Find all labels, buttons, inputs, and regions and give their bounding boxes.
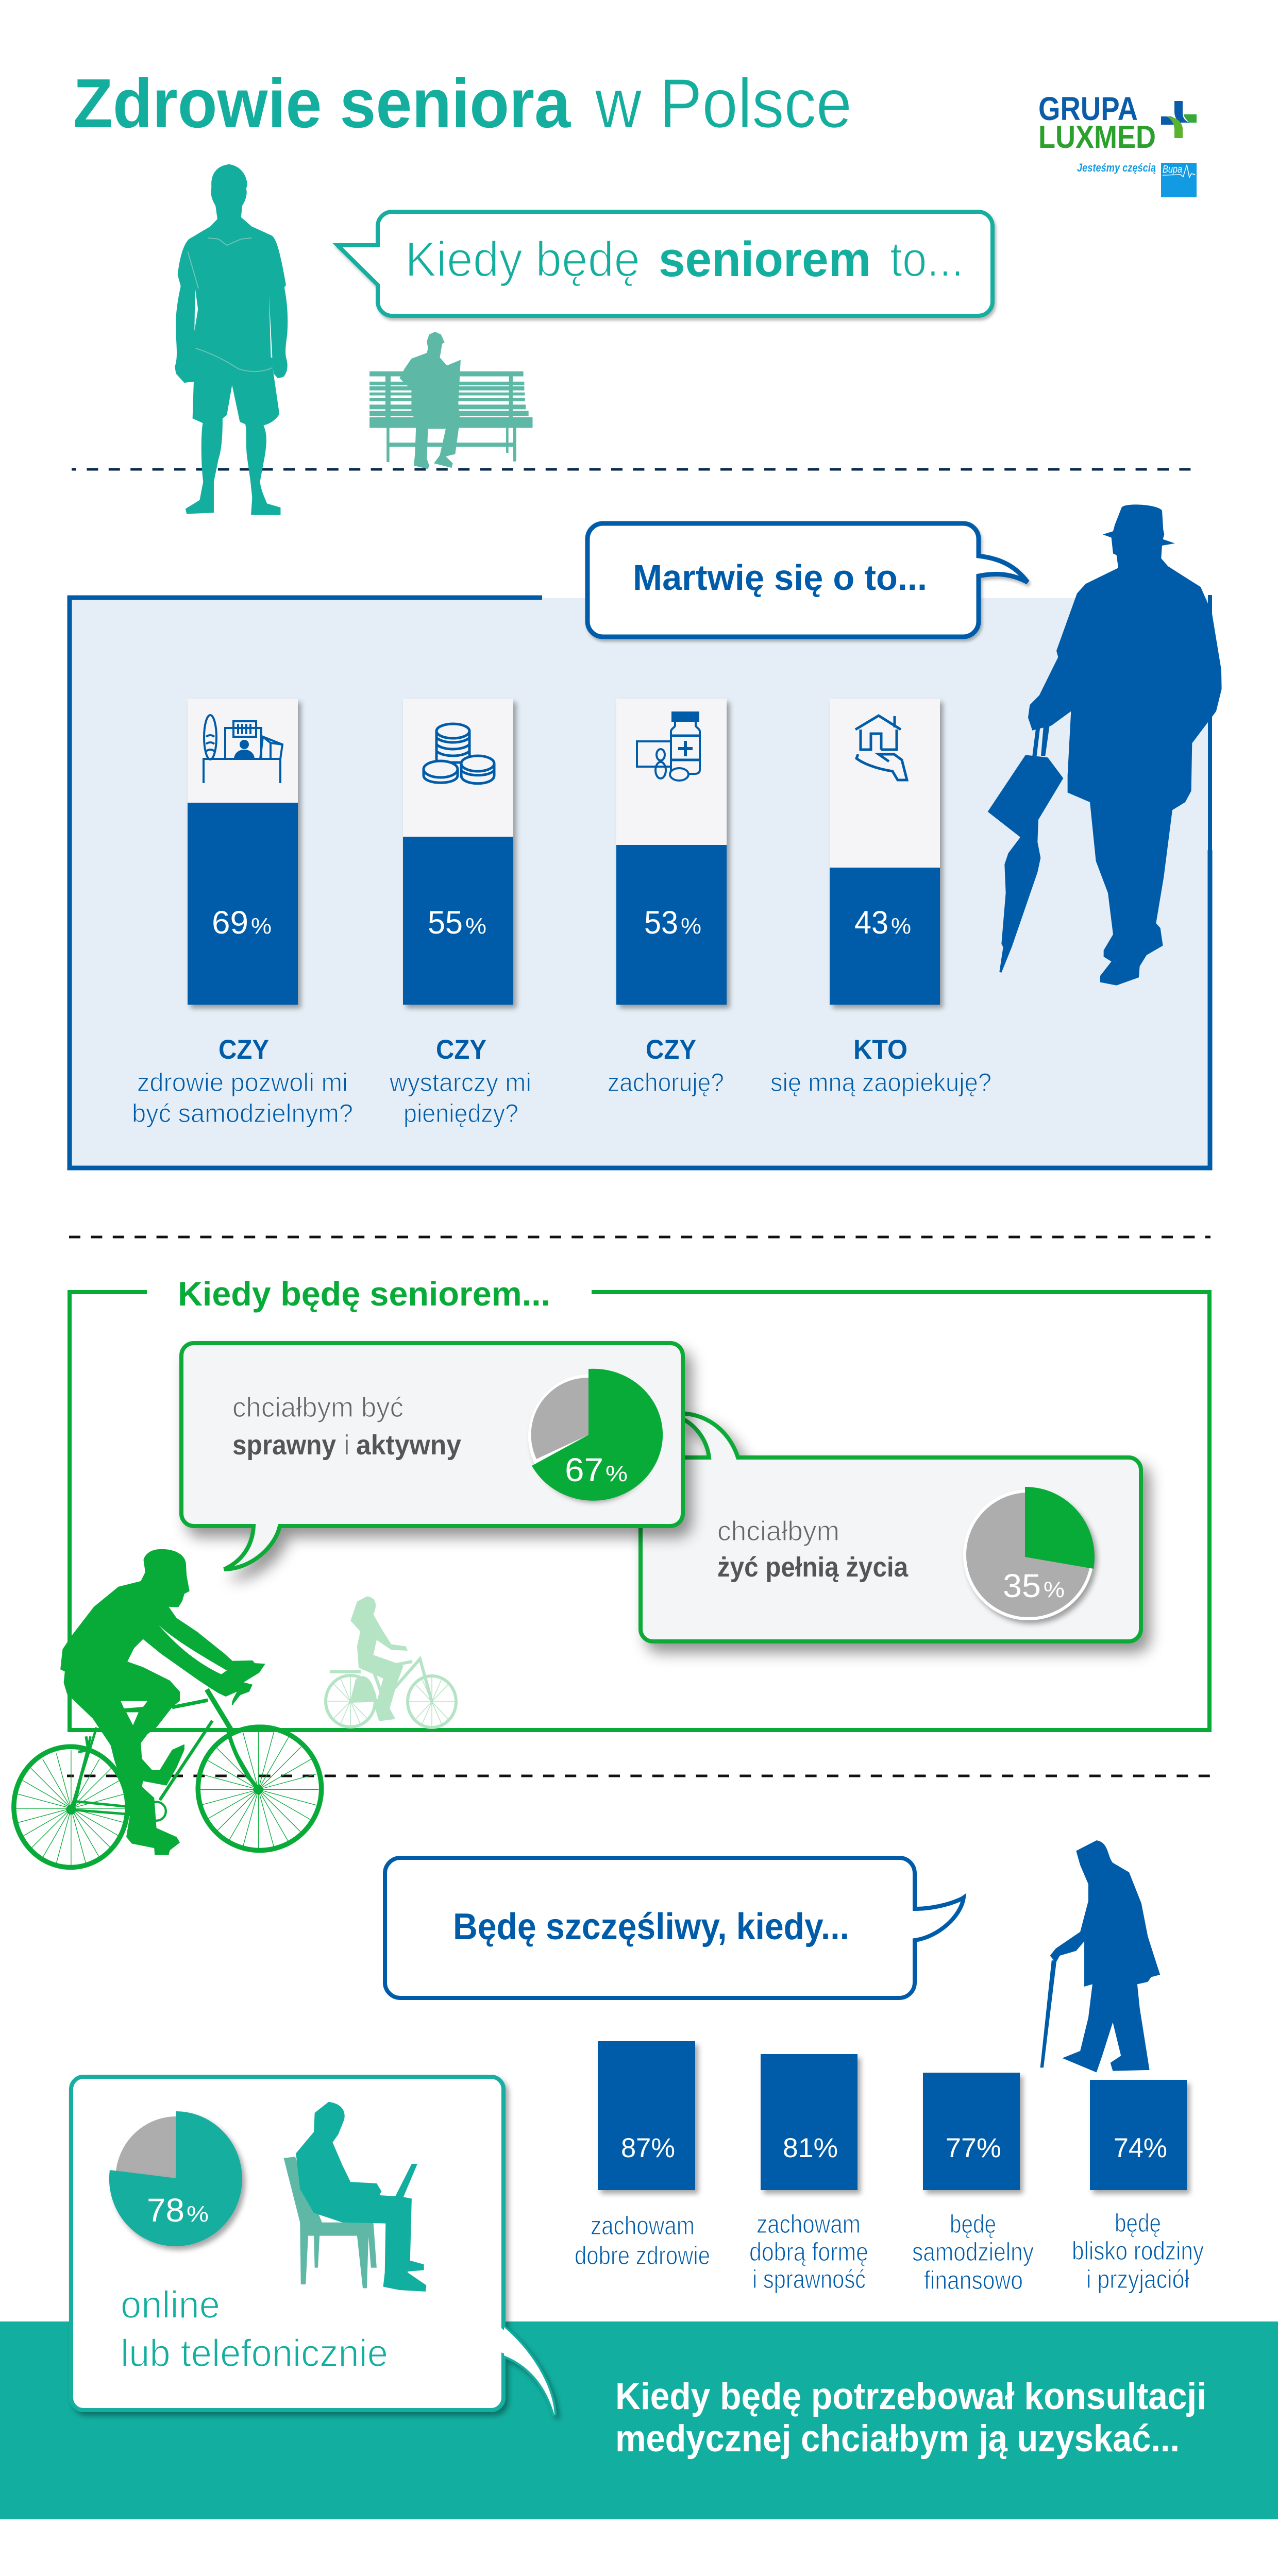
title: Zdrowie seniora	[73, 64, 571, 142]
labels under worry bars: się mną zaopiekuję?	[770, 1068, 991, 1097]
speech bubble: Będę szczęśliwy, kiedy	[385, 1858, 964, 1998]
callout: online or by phone: online	[121, 2283, 220, 2326]
labels under worry bars: CZY	[646, 1035, 696, 1065]
bar labels: dobre zdrowie	[575, 2241, 710, 2270]
bar: 53% choroba: %	[681, 913, 701, 939]
figure: man with hat, bag and umbrella	[988, 504, 1222, 986]
bar: 81%: 81%	[783, 2133, 838, 2163]
logo: Grupa Luxmed: Jesteśmy częścią	[1077, 161, 1156, 174]
panel: healthy and active	[14, 1275, 1209, 1867]
logo: Grupa Luxmed: LUXMED	[1038, 120, 1156, 155]
pie chart: 78%	[109, 2111, 242, 2246]
labels under worry bars: pieniędzy?	[403, 1099, 518, 1128]
bar labels: zachowam	[591, 2211, 695, 2240]
speech bubble: Kiedy będę seniorem to: seniorem	[659, 232, 871, 287]
icon: house in hand	[855, 716, 907, 780]
bar: 81%	[761, 2054, 857, 2190]
bar labels: blisko rodziny	[1072, 2236, 1204, 2265]
labels under worry bars: CZY	[436, 1035, 486, 1065]
speech bubble: Kiedy będę seniorem to: Kiedy będę	[405, 232, 640, 287]
heading: Kiedy będę seniorem...	[178, 1275, 550, 1313]
speech bubble: Kiedy będę seniorem to	[338, 212, 993, 316]
labels under worry bars: wystarczy mi	[389, 1068, 531, 1097]
bar: 69% zdrowie	[188, 699, 298, 1005]
icon: coins	[424, 724, 494, 784]
bar: 69% zdrowie: 69	[212, 905, 248, 941]
bar: 55% pieniądze	[403, 699, 513, 1005]
bar: 87%: 87%	[621, 2133, 675, 2163]
callout: 67%: chciałbym być	[232, 1392, 403, 1423]
bar labels: będę	[1115, 2209, 1161, 2238]
bar labels	[575, 2209, 1204, 2295]
callout: 67%	[181, 1343, 683, 1569]
bar labels: finansowo	[924, 2266, 1023, 2295]
pie chart: 78%: 78	[147, 2192, 184, 2229]
logo: Grupa Luxmed: GRUPA	[1038, 90, 1138, 127]
figure: man on a bicycle	[14, 1549, 322, 1867]
bar: 69% zdrowie: %	[251, 913, 272, 939]
title: w Polsce	[595, 64, 852, 142]
bar: 77%	[923, 2073, 1020, 2190]
panel: worries	[70, 504, 1222, 1168]
callout: 35%: żyć pełnią życia	[717, 1552, 909, 1583]
bar: 43% opieka: %	[891, 913, 911, 939]
bar labels: i przyjaciół	[1086, 2265, 1189, 2294]
labels under worry bars: zachoruję?	[608, 1068, 724, 1097]
labels under worry bars: zdrowie pozwoli mi	[137, 1068, 348, 1097]
labels under worry bars	[132, 1035, 991, 1128]
logo: Grupa Luxmed	[1038, 90, 1197, 197]
pie chart: 35%: %	[1044, 1577, 1065, 1602]
pie chart: 67%: 67	[565, 1451, 603, 1488]
callout: 67%: i	[345, 1430, 349, 1461]
icon: groceries	[204, 715, 282, 783]
pie chart: 35%: 35	[1003, 1567, 1041, 1604]
bar labels: i sprawność	[752, 2265, 866, 2294]
figure: woman on a bicycle, faded	[326, 1597, 456, 1727]
bar: 74%: 74%	[1114, 2133, 1167, 2163]
labels under worry bars: KTO	[853, 1035, 907, 1065]
callout: 67%: sprawny	[232, 1430, 336, 1461]
bar labels: będę	[950, 2210, 996, 2239]
speech bubble: Martwię się o to	[587, 523, 1028, 637]
labels under worry bars: CZY	[218, 1035, 269, 1065]
title	[73, 64, 852, 142]
figure: man reading on a bench	[369, 332, 532, 469]
pie chart: 67%	[528, 1369, 663, 1501]
bar labels: dobrą formę	[749, 2238, 868, 2266]
bar: 55% pieniądze: 55	[428, 905, 463, 941]
pie chart: 78%: %	[187, 2201, 209, 2227]
speech bubble: Będę szczęśliwy, kiedy: Będę szczęśliwy, kiedy...	[453, 1906, 849, 1947]
speech bubble: Kiedy będę seniorem to: to...	[890, 232, 964, 287]
labels under worry bars: być samodzielnym?	[132, 1099, 353, 1128]
band: medical consultation: medycznej chciałbym ją uzyskać...	[615, 2418, 1180, 2460]
callout: 67%: aktywny	[356, 1430, 461, 1461]
bar: 87%	[598, 2041, 695, 2190]
bar: 43% opieka: 43	[854, 905, 888, 941]
bar: 53% choroba	[616, 699, 727, 1005]
callout: 35%: chciałbym	[717, 1516, 839, 1547]
speech bubble: Martwię się o to: Martwię się o to...	[633, 557, 927, 598]
bar labels: zachowam	[756, 2210, 861, 2239]
bar labels: samodzielny	[912, 2238, 1034, 2266]
logo: Grupa Luxmed: Bupa	[1163, 164, 1182, 175]
bar: 77%: 77%	[946, 2133, 1001, 2163]
icon: medicine	[637, 713, 700, 781]
bar: 43% opieka	[830, 699, 940, 1005]
band: medical consultation	[0, 2321, 1278, 2519]
pie chart: 35%	[965, 1487, 1095, 1619]
callout: online or by phone	[71, 2077, 554, 2415]
pie chart: 67%: %	[606, 1461, 628, 1486]
figure: man with a laptop on a chair	[284, 2102, 426, 2292]
callout: online or by phone: lub telefonicznie	[121, 2332, 388, 2375]
bar: 74%	[1090, 2080, 1187, 2190]
bar: 55% pieniądze: %	[465, 913, 486, 939]
band: medical consultation: Kiedy będę potrzebował konsultacji	[615, 2376, 1206, 2417]
bar: 53% choroba: 53	[644, 905, 678, 941]
figure: standing man	[175, 164, 288, 515]
figure: old man with a cane	[1040, 1840, 1160, 2072]
callout: 35%	[641, 1413, 1141, 1641]
bar chart: happiness	[575, 2041, 1204, 2295]
